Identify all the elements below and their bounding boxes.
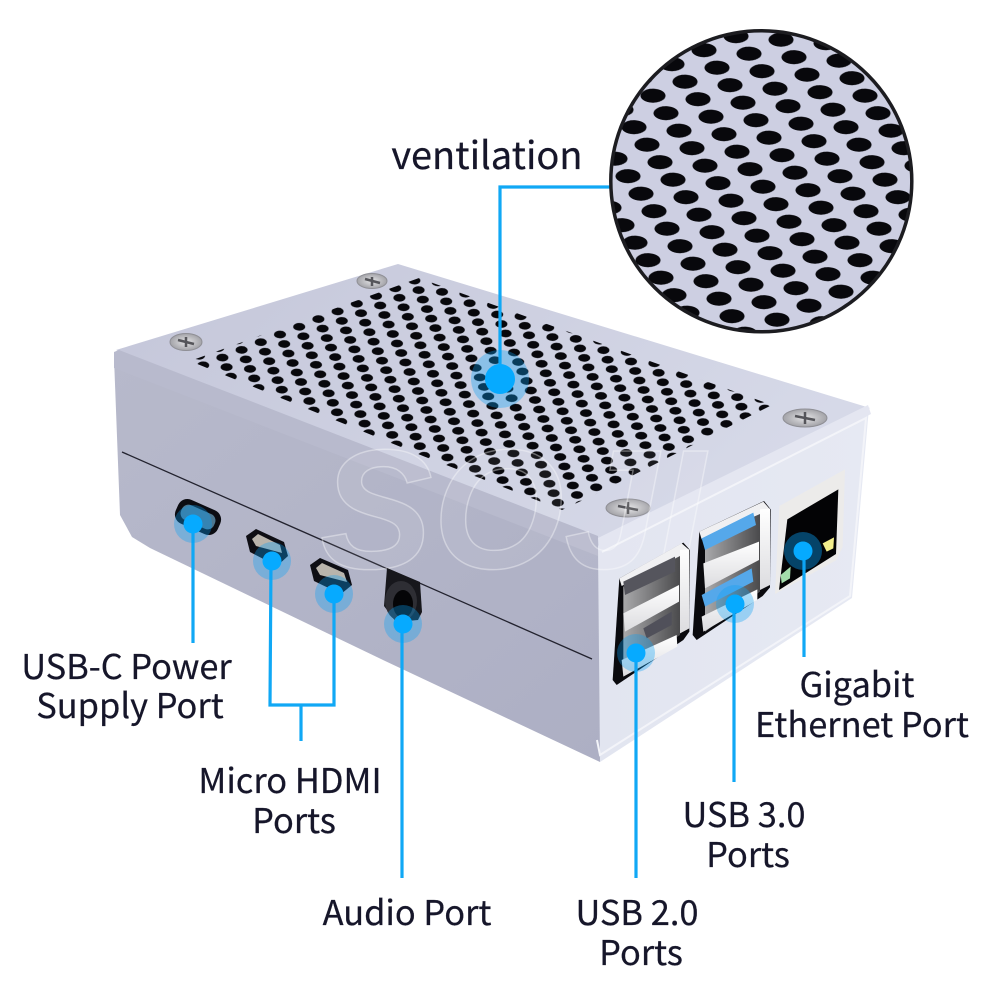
callout: USB 3.0 ports: [683, 585, 805, 877]
icon: Ethernet port: [775, 469, 845, 594]
marker: ventilation: [471, 350, 529, 408]
top face: [116, 264, 870, 546]
callout: Gigabit Ethernet port: [755, 532, 969, 747]
label: USB-C Power Supply Port: Supply Port: [36, 678, 224, 728]
leader line: ventilation: [500, 187, 612, 379]
marker: Ethernet: [784, 532, 822, 570]
callout: ventilation: [391, 125, 612, 408]
callout: audio port: [323, 605, 491, 935]
magnified ventilation detail: [611, 31, 912, 332]
marker: HDMI 1: [253, 542, 291, 580]
icon: USB 3.0 stack: [693, 501, 771, 640]
label: Audio Port: Audio Port: [323, 885, 491, 935]
label: USB 2.0 Ports: Ports: [599, 925, 683, 975]
label: Micro HDMI Ports: Micro HDMI: [198, 753, 382, 803]
watermark logo: SOJI: [320, 415, 709, 605]
label: USB 3.0 Ports: Ports: [706, 827, 790, 877]
marker: HDMI 2: [315, 575, 353, 613]
callout: USB 2.0 ports: [576, 634, 698, 975]
callout: Micro HDMI ports: [198, 542, 382, 843]
chamfer edge left: [114, 350, 598, 556]
icon: audio port: [384, 568, 422, 622]
icon: USB-C port: [172, 496, 224, 538]
case seam line: [122, 452, 592, 659]
ventilation hole field: [190, 278, 772, 510]
label: Micro HDMI Ports: Ports: [252, 793, 336, 843]
marker: USB 3.0: [716, 585, 754, 623]
front face: [598, 408, 869, 762]
icon: four case screws: [170, 274, 827, 517]
icon: USB 2.0 stack: [613, 543, 690, 685]
label: Gigabit Ethernet Port: Gigabit: [800, 657, 915, 707]
marker: USB 2.0: [617, 634, 655, 672]
left side face: [114, 358, 600, 762]
chamfer edge right: [598, 405, 871, 552]
label: USB 3.0 Ports: USB 3.0: [683, 787, 805, 837]
label: USB 2.0 Ports: USB 2.0: [576, 885, 698, 935]
icon: micro HDMI port 2: [310, 558, 352, 594]
callout: USB-C power supply port: [21, 505, 232, 728]
label: USB-C Power Supply Port: USB-C Power: [21, 639, 232, 689]
label: Gigabit Ethernet Port: Ethernet Port: [755, 697, 969, 747]
case body: [114, 264, 871, 762]
front face inner border: [597, 418, 866, 755]
heading: ventilation: ventilation: [391, 125, 583, 180]
icon: micro HDMI port 1: [246, 529, 288, 566]
marker: USB-C: [174, 505, 212, 543]
marker: audio: [384, 605, 422, 643]
